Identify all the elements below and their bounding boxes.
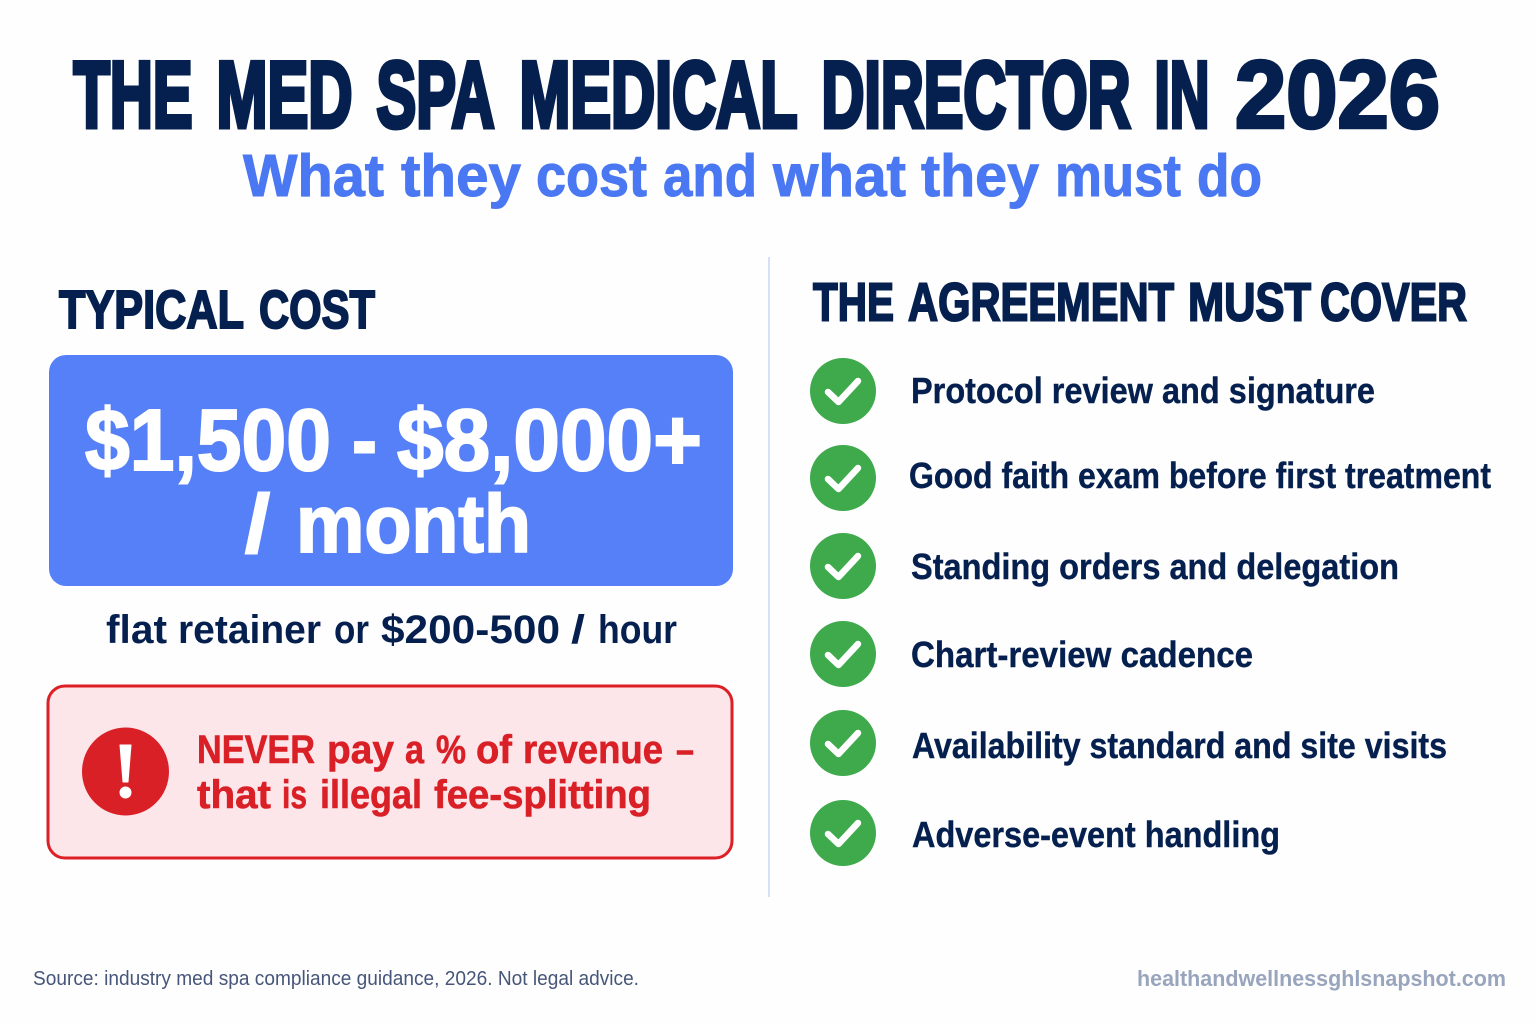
item: availability: Availability standard and site visits: [912, 725, 1447, 766]
title: [74, 42, 1440, 148]
subtitle: cost: [536, 143, 647, 209]
price box: [49, 355, 733, 586]
warning text: revenue: [523, 728, 663, 772]
item: protocol review: [810, 358, 1375, 424]
heading: agreement must cover: COVER: [1320, 272, 1467, 332]
warning text: %: [436, 728, 466, 772]
retainer note: hour: [598, 608, 677, 652]
item: chart review: [810, 621, 1253, 687]
item: adverse event: [810, 800, 1280, 866]
price range: -: [352, 392, 377, 489]
subtitle: they: [921, 143, 1039, 209]
warning text: is: [282, 773, 307, 817]
title: MEDICAL: [520, 42, 798, 147]
warning text: a: [405, 728, 425, 772]
item: adverse event: Adverse-event handling: [912, 814, 1280, 855]
subtitle: do: [1197, 143, 1262, 209]
warning text: –: [676, 728, 694, 772]
subtitle: [243, 143, 1262, 209]
title: DIRECTOR: [822, 42, 1130, 147]
retainer note: /: [571, 608, 585, 652]
website: healthandwellnessghlsnapshot.com: [1137, 966, 1506, 991]
title: 2026: [1235, 42, 1440, 148]
item: standing orders: Standing orders and delegation: [911, 546, 1399, 587]
warning text: of: [476, 728, 513, 772]
title: MED: [216, 42, 352, 147]
heading: typical cost: TYPICAL: [59, 280, 244, 340]
panel: typical cost: [48, 280, 733, 858]
price range: $1,500: [85, 392, 331, 489]
price range: $8,000+: [397, 392, 702, 489]
item: good faith exam: [810, 445, 1491, 511]
warning text: [197, 728, 694, 817]
price unit: month: [296, 479, 531, 570]
price unit: /: [245, 479, 270, 570]
subtitle: What: [243, 143, 384, 209]
warning text: NEVER: [197, 728, 315, 772]
heading: agreement must cover: MUST: [1188, 272, 1311, 332]
warning text: that: [197, 773, 271, 817]
heading: agreement must cover: [813, 272, 1467, 332]
icon: exclamation: [82, 728, 169, 816]
item: chart review: Chart-review cadence: [911, 634, 1253, 675]
retainer note: flat: [106, 608, 167, 652]
title: THE: [74, 42, 192, 147]
warning text: pay: [327, 728, 395, 772]
retainer note: or: [334, 608, 369, 652]
item: standing orders: [810, 533, 1399, 599]
heading: typical cost: COST: [259, 280, 375, 340]
warning text: fee-splitting: [434, 773, 651, 817]
source note: Source: industry med spa compliance guidance, 2026. Not legal advice.: [33, 968, 639, 990]
title: IN: [1154, 42, 1210, 147]
panel: agreement checklist: [810, 272, 1491, 866]
retainer note: retainer: [178, 608, 321, 652]
subtitle: they: [401, 143, 521, 209]
heading: agreement must cover: THE: [813, 272, 894, 332]
retainer note: $200-500: [381, 608, 560, 652]
item: protocol review: Protocol review and signature: [911, 370, 1375, 411]
retainer note: [106, 608, 677, 652]
subtitle: must: [1055, 143, 1181, 209]
warning callout: [48, 686, 732, 858]
price range: [85, 392, 702, 489]
item: availability: [810, 710, 1447, 776]
subtitle: what: [772, 143, 906, 209]
title: SPA: [376, 42, 494, 147]
warning text: illegal: [320, 773, 422, 817]
subtitle: and: [663, 143, 757, 209]
heading: agreement must cover: AGREEMENT: [908, 272, 1174, 332]
vertical divider: [768, 257, 770, 897]
